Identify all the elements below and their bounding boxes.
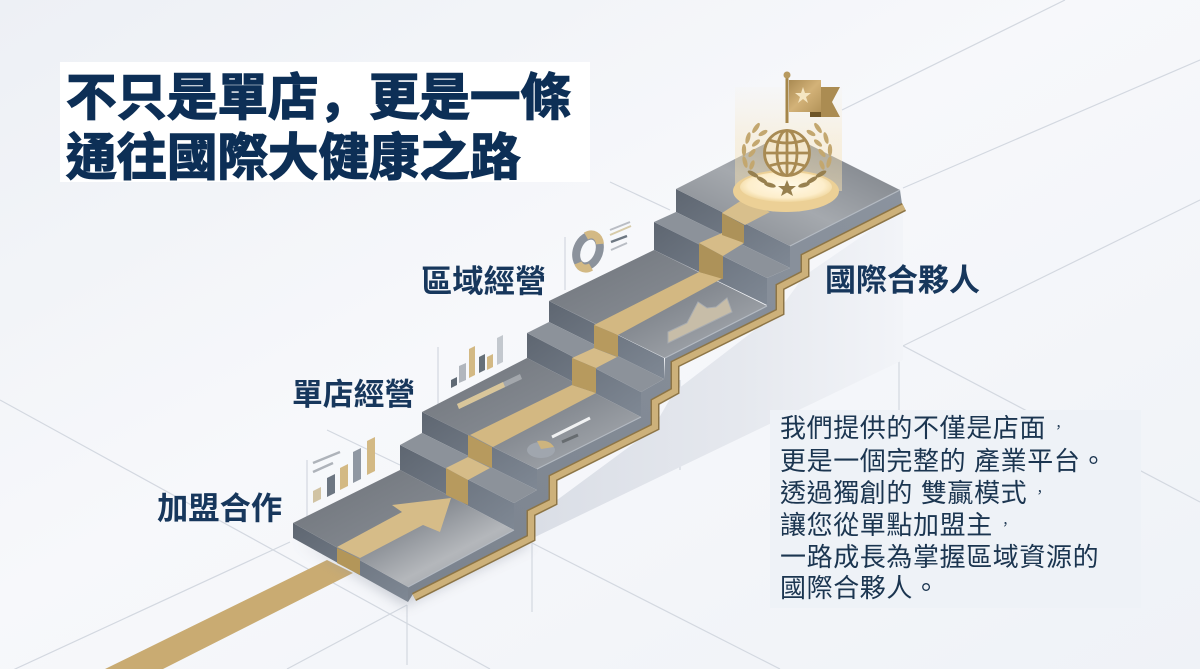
- description text block: 國際合夥人。: [780, 573, 940, 603]
- chart: franchise bars: [313, 437, 375, 503]
- description text block: 更是一個完整的 產業平台。: [780, 446, 1107, 476]
- icon: globe with laurel: [741, 122, 833, 196]
- description text block: [770, 410, 1141, 608]
- description text block: 透過獨創的 雙贏模式: [780, 478, 1027, 508]
- icon: slider on step: [457, 374, 522, 409]
- chart: region donut: [572, 222, 631, 270]
- title: 通往國際大健康之路: [66, 129, 520, 186]
- icon: pie and lines on step: [527, 418, 590, 458]
- platform shadow: [296, 530, 530, 606]
- step faces: [400, 189, 790, 530]
- icon: mountain chart on step: [668, 298, 732, 343]
- description text block: 我們提供的不僅是店面: [780, 413, 1046, 443]
- staircase: [293, 133, 904, 602]
- step treads: [293, 133, 900, 587]
- title: 不只是單店，更是一條: [66, 56, 571, 130]
- description text block: 讓您從單點加盟主: [780, 510, 993, 540]
- label: single store: 單店經營: [292, 377, 415, 412]
- description text block: 一路成長為掌握區域資源的: [780, 542, 1099, 572]
- label: regional: 區域經營: [421, 264, 546, 299]
- icon: flag: [784, 72, 840, 123]
- icon: golden pedestal glow: [733, 87, 842, 212]
- label: international partner: 國際合夥人: [825, 263, 980, 298]
- gold trim line: [414, 207, 904, 597]
- chart: single store bars: [451, 335, 503, 388]
- near edge highlights: [408, 190, 900, 587]
- gold path on stairs: [337, 200, 770, 575]
- label: franchise: 加盟合作: [157, 491, 282, 526]
- stair side faces: [408, 190, 902, 602]
- gold path on floor: [105, 560, 353, 669]
- platform front edge: [293, 523, 408, 602]
- description text block: ，: [1033, 485, 1047, 500]
- arrow on platform: [337, 498, 451, 558]
- wall below stairs: [533, 208, 903, 538]
- title: [60, 56, 590, 186]
- description text block: ，: [999, 517, 1012, 532]
- description text block: ，: [1052, 420, 1066, 435]
